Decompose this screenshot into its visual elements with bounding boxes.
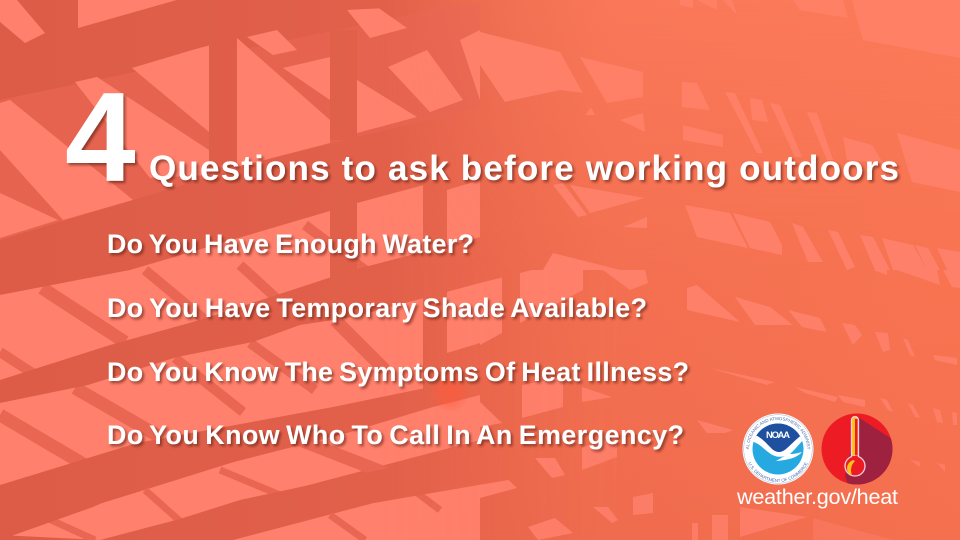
open sky between lower beams: [0, 170, 423, 390]
icon: NOAA logo: NOAA: [766, 429, 790, 440]
icon: thermometer badge: [822, 414, 892, 484]
icon: NOAA logo: [742, 414, 814, 484]
upper bay purlin tone: [0, 0, 480, 245]
question 1: Do You Have Enough Water?: [107, 229, 474, 259]
question 3: Do You Know The Symptoms Of Heat Illness?: [107, 357, 689, 387]
purlins crossing the lower bays: [0, 225, 440, 540]
icon: NOAA logo: NATIONAL OCEANIC AND ATMOSPHERIC ADMINISTRATION: [746, 417, 810, 450]
question list: [107, 229, 689, 450]
icon: NOAA logo: U.S. DEPARTMENT OF COMMERCE: [748, 462, 808, 482]
link text: weather.gov/heat: weather.gov/heat: [736, 484, 898, 509]
title: large numeral 4: 4: [65, 66, 136, 208]
question 2: Do You Have Temporary Shade Available?: [107, 293, 647, 323]
question 4: Do You Know Who To Call In An Emergency?: [107, 420, 684, 450]
title: questions to ask before working outdoors: Questions to ask before working outdoors: [149, 149, 899, 188]
beams and columns drawn over the sky: [0, 0, 600, 540]
